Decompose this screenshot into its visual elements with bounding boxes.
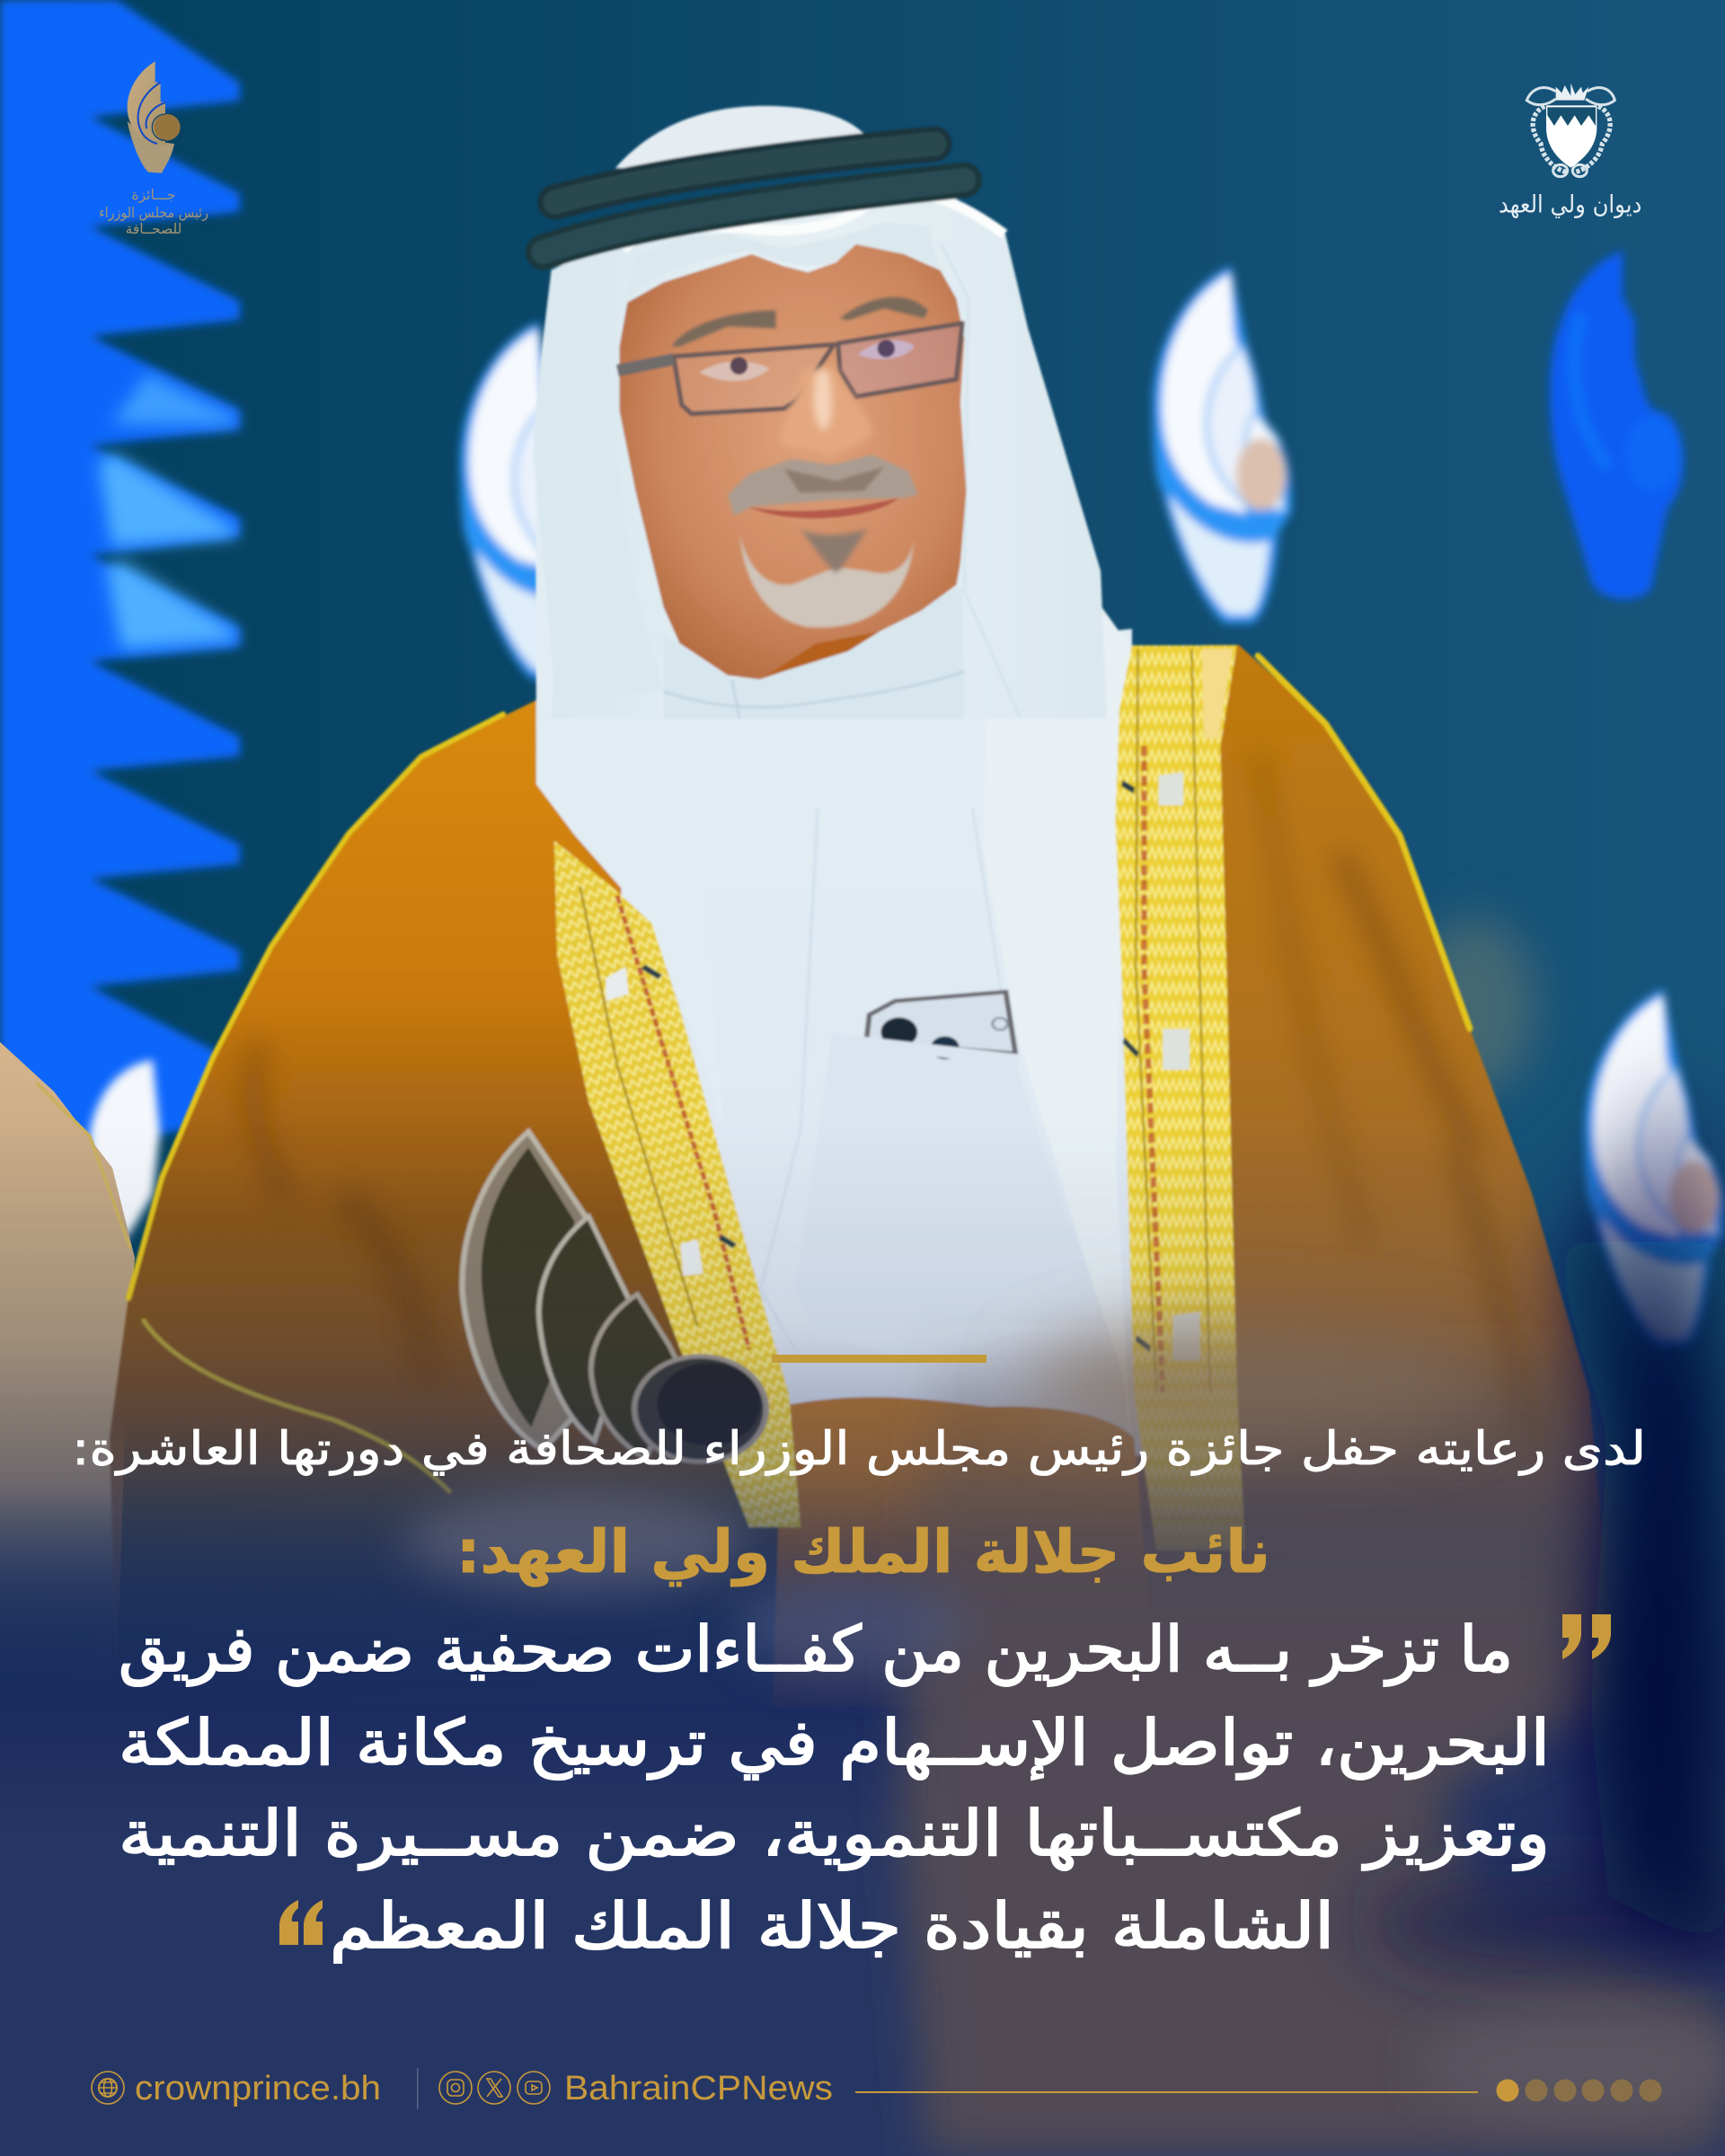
award logo — [99, 61, 208, 237]
white logo lower right — [1585, 989, 1723, 1347]
face — [619, 244, 967, 679]
ghutra lower drapes — [535, 270, 1130, 1437]
phone — [832, 992, 1018, 1066]
warm glow by right shoulder — [1411, 916, 1536, 1096]
logo behind head — [460, 322, 598, 679]
logo text: رئيس مجلس الوزراء — [99, 204, 208, 222]
blue logo far right — [1550, 251, 1684, 599]
robe folds — [253, 755, 1527, 1437]
quote line 1: ما تزخر بــه البحرين من كفــاءات صحفية ضمن فريق — [119, 1613, 1513, 1686]
icon: youtube — [518, 2072, 550, 2104]
collar — [664, 588, 964, 719]
dark right side — [1554, 1078, 1725, 1958]
gold heading: نائب جلالة الملك ولي العهد: — [456, 1517, 1270, 1587]
sleeves — [773, 1397, 1159, 1707]
icon: x — [478, 2072, 510, 2104]
head — [533, 106, 1107, 719]
footer — [92, 2068, 1662, 2109]
logo text: جـــائزة — [132, 187, 175, 203]
logo text — [99, 187, 208, 237]
gold divider — [772, 1355, 986, 1363]
quote — [119, 1613, 1550, 1963]
mouth — [748, 498, 898, 518]
thobe — [620, 629, 1168, 1455]
glasses — [617, 323, 962, 414]
subtitle: لدى رعايته حفل جائزة رئيس مجلس الوزراء للصحافة في دورتها العاشرة: — [72, 1423, 1646, 1476]
robe — [110, 645, 1617, 1707]
trophy — [463, 1132, 766, 1462]
quote line 2: البحرين، تواصل الإســهام في ترسيخ مكانة المملكة — [119, 1706, 1550, 1780]
wreath — [1526, 88, 1614, 177]
eyebrows — [671, 297, 928, 347]
ghutra frame — [533, 186, 1107, 719]
icon: globe — [92, 2072, 124, 2104]
blue zigzag band — [0, 0, 240, 1168]
blurred warm shape — [898, 1330, 1725, 2156]
light bottom right haze — [1420, 2012, 1725, 2120]
figure — [110, 106, 1617, 1707]
neighbouring person left edge — [0, 1042, 135, 1689]
moustache — [728, 455, 918, 516]
ghutra cap — [615, 106, 864, 170]
blurred hands — [404, 1491, 746, 1590]
quote line 4: الشاملة بقيادة جلالة الملك المعظم — [330, 1889, 1334, 1963]
warm glow behind subtitle — [1024, 1321, 1491, 1446]
goatee — [739, 529, 915, 628]
emblem caption: ديوان ولي العهد — [1499, 191, 1641, 219]
crown prince court emblem — [1499, 84, 1641, 219]
nose — [780, 367, 872, 456]
left gold band — [554, 841, 801, 1527]
page dots — [1497, 2079, 1662, 2102]
white logo lower left — [90, 1060, 160, 1240]
neck shadow — [760, 632, 880, 679]
icon: instagram — [439, 2072, 472, 2104]
social handle: BahrainCPNews — [564, 2070, 833, 2107]
agal — [544, 144, 964, 252]
opening quote mark — [1562, 1614, 1611, 1659]
crown — [1556, 84, 1588, 101]
blurred logo fragments in the band — [99, 373, 235, 649]
pocket — [795, 1033, 1104, 1363]
website: crownprince.bh — [135, 2070, 381, 2107]
dark band lower right — [1366, 1873, 1725, 1972]
quote line 3: وتعزيز مكتســباتها التنموية، ضمن مســيرة التنمية — [119, 1797, 1550, 1871]
closing quote mark — [279, 1900, 323, 1945]
robe gold trim — [128, 656, 1470, 1491]
eyes — [700, 340, 915, 381]
logo mark — [128, 61, 181, 173]
right gold band — [1115, 645, 1245, 1551]
bottom gradient overlay — [0, 1078, 1725, 2156]
blurred background logos — [90, 251, 1723, 1347]
logo text: للصحــافة — [126, 221, 181, 237]
shield — [1546, 105, 1597, 168]
white logo right — [1153, 266, 1291, 623]
